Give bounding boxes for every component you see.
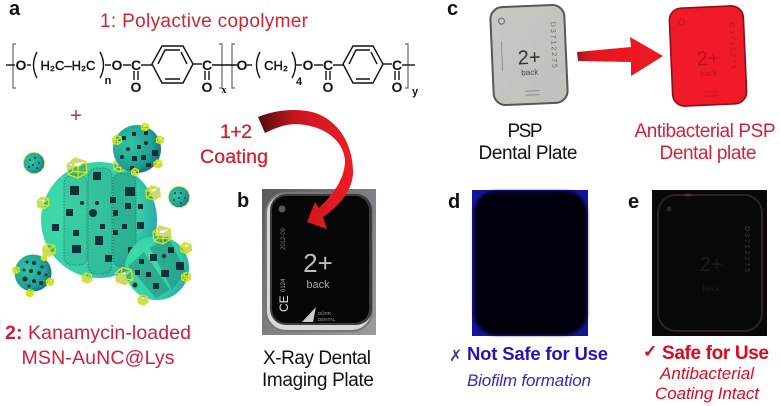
caption: kanamycin-loaded MSN-AuNC@Lys (5, 322, 191, 369)
chemical structure: O (112, 57, 123, 73)
plus sign: + (70, 105, 82, 127)
chemical structure: O (16, 57, 27, 73)
chemical structure: y (412, 86, 419, 98)
plate photo: 2+ (303, 248, 333, 278)
caption: kanamycin-loaded MSN-AuNC@Lys: 2: Kanamycin-loaded (5, 322, 191, 344)
plate photo: back (306, 279, 330, 291)
panel: d, biofilm result (448, 190, 608, 390)
plate photo (262, 189, 376, 335)
chemical structure: O (392, 79, 403, 95)
caption: x-ray dental imaging plate (262, 348, 374, 391)
plate photo: DÜRR (318, 310, 332, 316)
text: antibacterial coating intact: Coating Intact (655, 384, 760, 403)
coating label: 1+2 coating: Coating (200, 146, 268, 168)
chemical structure: C (392, 57, 402, 73)
label: d: d (448, 191, 460, 213)
caption: antibacterial PSP dental plate (634, 121, 776, 164)
status: safe for use: Safe for Use (662, 343, 769, 364)
red antibacterial PSP plate: 2+ (696, 48, 720, 70)
text: antibacterial coating intact (655, 364, 760, 403)
coating label: 1+2 coating (200, 121, 268, 168)
plate photo: 0124 (281, 278, 287, 292)
text: antibacterial coating intact: Antibacterial (659, 364, 755, 383)
chemical structure: CH₂ (264, 58, 288, 73)
panel: a, polymer and nanoparticles (5, 0, 419, 369)
heading: polyactive copolymer: 1: Polyactive copolymer (100, 11, 309, 32)
chemical structure: O (303, 57, 314, 73)
status: not safe for use: ✗ (449, 348, 462, 365)
red antibacterial PSP plate (669, 5, 747, 107)
chemical structure: O (131, 79, 142, 95)
small particles (24, 152, 190, 208)
chemical structure: O (323, 79, 334, 95)
caption: PSP dental plate: Dental Plate (478, 143, 578, 164)
panel: c, PSP plates (447, 0, 776, 164)
caption: kanamycin-loaded MSN-AuNC@Lys: MSN-AuNC@Lys (22, 347, 175, 369)
upper right particle (112, 123, 164, 176)
arrow: curved red coating arrow (258, 110, 353, 229)
label: b: b (237, 190, 249, 212)
caption: x-ray dental imaging plate: Imaging Plate (262, 370, 374, 391)
chemical structure: O (202, 79, 213, 95)
chemical structure: C (131, 57, 141, 73)
caption: PSP dental plate: PSP (508, 121, 542, 142)
caption: antibacterial PSP dental plate: Dental plate (660, 143, 756, 164)
grey PSP plate (490, 4, 568, 106)
label: e: e (628, 191, 639, 213)
grey PSP plate: 2+ (517, 47, 541, 69)
caption: antibacterial PSP dental plate: Antibacterial PSP (634, 121, 776, 142)
caption: PSP dental plate (478, 121, 578, 164)
chemical structure: C (202, 57, 212, 73)
chemical structure: H₂C–H₂C (41, 58, 95, 73)
panel: b, x-ray dental imaging plate (237, 189, 376, 391)
status: safe for use: ✓ (643, 342, 657, 361)
nanoparticle illustration (13, 123, 191, 305)
chemical structure: O (237, 57, 248, 73)
coating label: 1+2 coating: 1+2 (220, 121, 252, 143)
fluorescence image e: 2+ (700, 254, 722, 276)
red antibacterial PSP plate: D3712275 (728, 23, 737, 69)
panel: e, antibacterial result (628, 190, 769, 403)
grey PSP plate: D3712275 (549, 22, 558, 68)
chemical structure: n (105, 75, 112, 87)
chemical structure: x (222, 85, 226, 96)
chemical structure: 4 (296, 76, 303, 88)
plate photo: DENTAL (318, 317, 336, 322)
caption: x-ray dental imaging plate: X-Ray Dental (263, 348, 371, 369)
fluorescence image d (472, 190, 588, 336)
grey PSP plate: back (521, 68, 539, 77)
lower left particle (13, 254, 54, 297)
text: biofilm formation: Biofilm formation (467, 371, 591, 390)
chemical structure (6, 44, 419, 98)
arrow: straight red arrow (577, 37, 663, 76)
fluorescence image e (652, 190, 767, 336)
fluorescence image e: back (703, 284, 720, 293)
fluorescence image e: D3712275 (743, 226, 750, 272)
red antibacterial PSP plate: back (700, 69, 718, 78)
lower right particle (115, 226, 191, 305)
big sphere (37, 158, 160, 283)
status: not safe for use: Not Safe for Use (467, 343, 608, 364)
plate photo: 2012-09 (281, 227, 287, 250)
plate photo: CE (277, 295, 291, 312)
chemical structure: C (323, 57, 333, 73)
